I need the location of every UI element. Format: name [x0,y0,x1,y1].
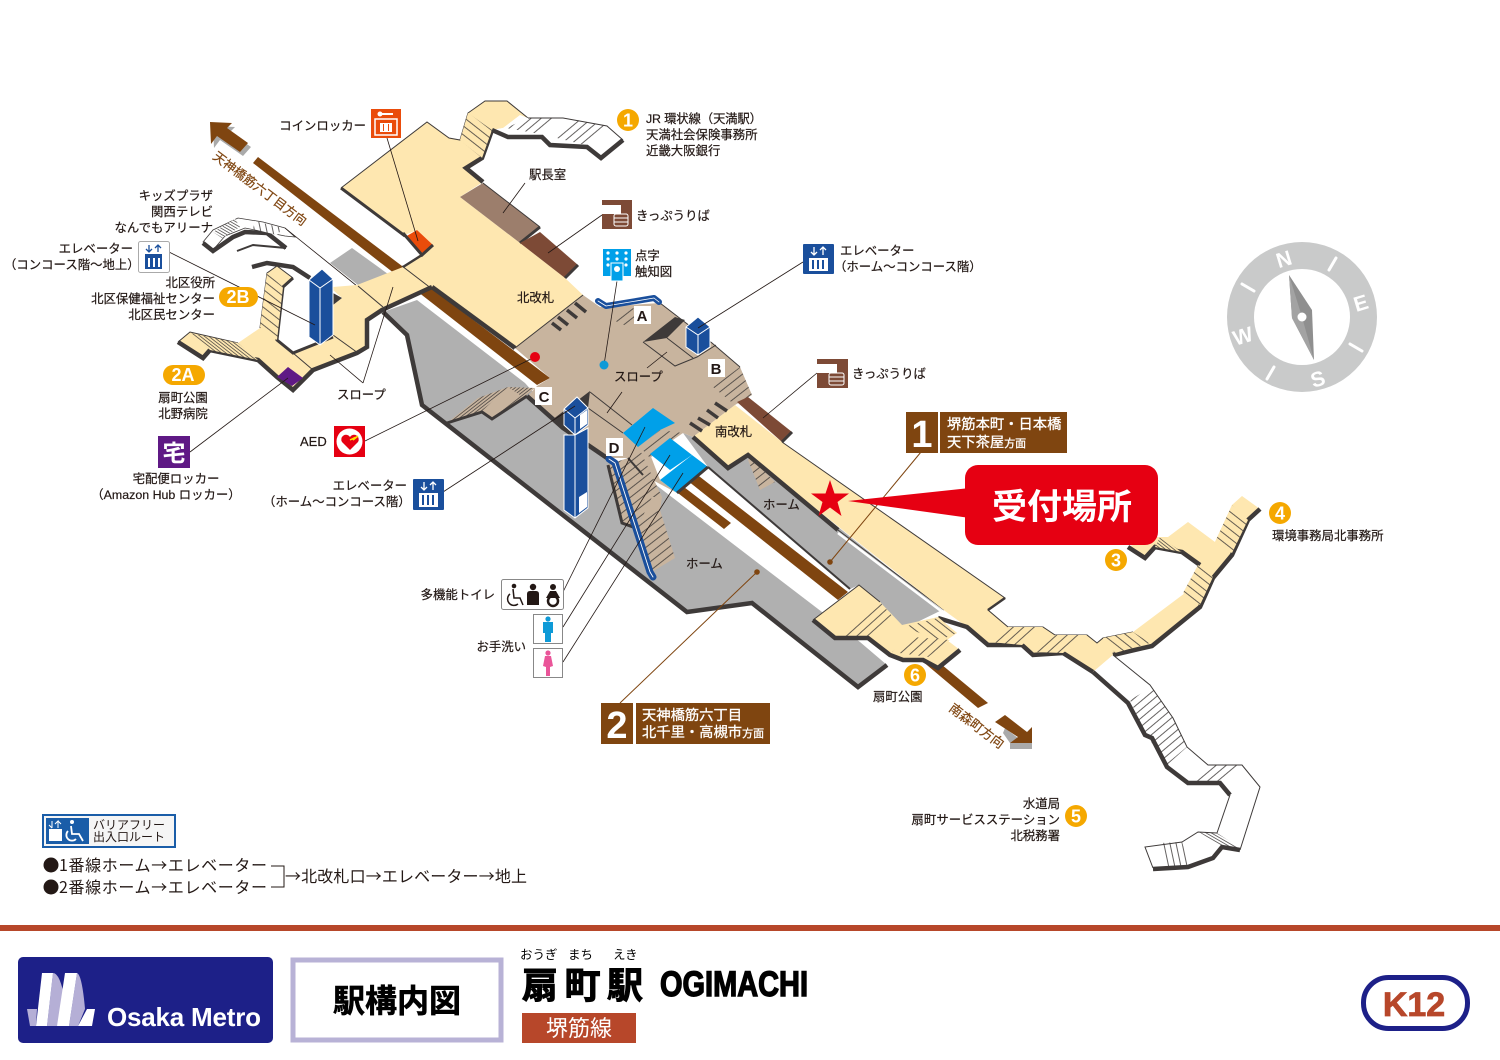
station name: OGIMACHI [660,965,808,1004]
text: exit 5 destinations: 扇町サービスステーション [912,813,1060,827]
stairs: east passage hatches [990,505,1248,653]
sign: platform 2 direction: 天神橋筋六丁目 [642,707,742,724]
text: platform 1: ホーム [763,498,800,512]
marker: exit 2B: 2B [226,287,250,307]
text: ward office: 北区保健福祉センター [91,291,215,306]
marker: exit 5 [1065,805,1087,827]
marker: exit 5: 5 [1071,806,1081,826]
icon: coin locker [371,109,401,138]
compass: E [1351,291,1371,317]
compass: N [1273,247,1295,273]
slope: near center elevator [552,391,632,433]
furigana: まち [568,948,593,962]
text: platform 2: ホーム [686,557,723,571]
text: elevator center: エレベーター [333,479,407,493]
icon: multipurpose toilet [502,580,564,610]
room: station master [460,183,540,243]
text: elevator west [4,242,140,272]
title box: station map [293,960,501,1040]
icon: elevator west [138,242,170,272]
slope: near elevator B [643,317,716,366]
room: south ticket machines [737,397,792,442]
station name [522,965,808,1006]
title box: station map: 駅構内図 [333,983,461,1019]
brown leader to platform 1 [827,452,921,565]
sign: platform 2 direction [601,703,770,747]
text: restrooms: お手洗い [476,640,526,654]
icon: elevator east [803,244,834,274]
text: elevator east: （ホーム〜コンコース階） [834,260,982,274]
text: exit 6 destination: 扇町公園 [873,690,923,704]
brown leader to platform 2 [620,569,760,703]
leader lines [169,138,817,662]
text: exit 5 destinations [912,797,1060,843]
stairs: small hatch on Line 1 platform [748,457,775,490]
text: station master room: 駅長室 [529,168,566,182]
text: elevator west: （コンコース階〜地上） [4,258,140,272]
logo: Osaka Metro: Osaka Metro [107,1002,261,1032]
platform: Line 1 platform [683,433,944,628]
text: slope center: スロープ [614,370,663,384]
stairs: north cream hatches [190,113,492,360]
concourse: south cream area and east passage [693,405,1260,672]
text: slope west: スロープ [337,388,386,402]
elevator: east box [686,317,710,355]
sign: platform 1 direction: 1 [911,414,933,456]
legend: barrier free route text: 2番線ホーム→エレベーター [59,874,267,898]
text: exit 5 destinations: 北税務署 [1010,829,1060,843]
marker: exit 6: 6 [910,666,920,686]
icon: men's toilet [534,614,562,644]
icon: AED [334,426,365,457]
divider line [0,925,1500,931]
label: A [634,306,651,325]
restroom: women's toilet floor [660,455,708,493]
sign: platform 1 direction [906,412,1067,456]
icon: ticket machine north [602,200,632,229]
fare gates: south [690,403,727,431]
text: ward office [91,275,215,322]
marker: exit 4 [1269,502,1291,524]
text: exit 1 destinations: 天満社会保険事務所 [646,127,758,142]
text: coin locker: コインロッカー [279,119,366,133]
legend: barrier free route text [44,852,527,898]
slope lines in lower cream passage [293,266,432,370]
text: elevator center [263,479,411,509]
sign: platform 1 direction: 堺筋本町・日本橋 [947,416,1061,433]
text: elevator east [834,244,982,274]
sign: platform 2 direction: 北千里・高槻市方面 [642,724,764,741]
icon: braille map [603,249,631,281]
stairs: D lower flights [607,450,675,573]
label: B [708,359,725,378]
track: northbound rail strip [253,157,550,385]
legend: barrier free badge: バリアフリー [93,818,165,832]
escalator: A [598,298,659,306]
text: ticket south: きっぷうりば [852,367,926,381]
text: south gate: 南改札 [715,424,752,439]
text: kids plaza: なんでもアリーナ [114,221,213,235]
legend: barrier free route text: 1番線ホーム→エレベーター [59,852,267,876]
stairs: A [613,306,640,325]
direction text: north-west: 天神橋筋六丁目方向 [210,148,310,229]
delivery locker room [277,367,303,386]
icon: delivery locker [158,436,190,468]
stairs: exit 6 block [813,585,960,668]
text: braille map [635,249,672,279]
stairs: B [713,367,752,405]
passage: white section to exit 5 [1093,655,1260,869]
icon: women's toilet [534,648,562,678]
sign: platform 1 direction: 天下茶屋方面 [947,434,1026,451]
text: north gate: 北改札 [517,290,554,305]
direction text: south-east: 南森町方向 [946,700,1007,752]
text: kids plaza [114,188,213,235]
legend: barrier free badge [43,815,175,847]
text: ward office: 北区役所 [165,275,215,290]
text: elevator west: エレベーター [59,242,133,256]
text: exit 2A destinations: 扇町公園 [158,391,208,405]
station code: K12 [1364,978,1468,1028]
text: delivery locker: （Amazon Hub ロッカー） [91,488,241,502]
station code: K12: K12 [1383,986,1445,1024]
braille map location dot [600,360,608,370]
tan area outline edges [527,396,607,458]
platform: small grey section north [330,248,388,285]
text: ward office: 北区民センター [128,308,215,322]
track: southern rail strips [674,473,988,708]
icon: delivery locker: 宅 [162,440,186,466]
text: multipurpose toilet: 多機能トイレ [421,587,495,602]
sign: platform 2 direction: 2 [606,705,628,747]
marker: exit 2A: 2A [171,365,195,385]
text: kids plaza: キッズプラザ [139,188,213,203]
marker: exit 2B [219,287,258,307]
legend: barrier free route text: →北改札口→エレベーター→地上 [285,863,527,887]
line name: Sakaisuji: 堺筋線 [546,1016,612,1041]
text: delivery locker: 宅配便ロッカー [133,472,219,486]
escalator: D [609,459,653,577]
concourse: north cream area with 2A/2B passages [178,101,583,390]
label: D [606,438,623,457]
compass: S [1308,367,1328,393]
label: A: A [637,308,648,325]
label: C [535,387,552,406]
station name: 扇町駅 [522,965,643,1006]
logo: Osaka Metro [18,957,273,1043]
text: elevator center: （ホーム〜コンコース階） [263,495,411,509]
marker: exit 2A [163,365,205,385]
star: reception location [811,480,849,516]
text: ticket north: きっぷうりば [636,209,710,223]
callout: reception: 受付場所 [992,488,1132,527]
marker: exit 6 [904,664,926,686]
marker: exit 3: 3 [1111,550,1121,570]
text: exit 5 destinations: 水道局 [1023,797,1060,811]
text: exit 4 destination: 環境事務局北事務所 [1272,529,1384,543]
callout: reception [848,465,1158,545]
text: braille map: 触知図 [635,265,672,279]
furigana [520,948,638,962]
track: arrow north-west [210,122,251,156]
restroom: multipurpose toilet floor [623,408,683,458]
label: B: B [711,361,722,378]
text: exit 2A destinations [158,391,208,421]
text: kids plaza: 関西テレビ [151,205,213,219]
icon: elevator center [413,479,444,510]
text: elevator east: エレベーター [840,244,914,258]
room: north ticket machines [520,232,578,278]
text: exit 1 destinations: 近畿大阪銀行 [646,144,720,158]
marker: exit 1: 1 [623,110,633,130]
text: exit 1 destinations: JR 環状線（天満駅） [646,111,762,126]
label: D: D [609,440,620,457]
text: delivery locker [91,472,241,502]
platform: Line 2 platform [383,300,887,687]
fare gates: north [552,303,586,330]
marker: exit 3 [1105,549,1127,571]
passage: exit 1 white section [492,115,623,158]
text: braille map: 点字 [635,249,660,263]
room arc: kids plaza passage [203,218,383,307]
label: C: C [539,389,550,406]
furigana: えき [613,948,638,962]
furigana: おうぎ [520,948,558,962]
track: arrow south-east [995,715,1032,749]
restroom: men's toilet floor [650,438,692,470]
text: exit 1 destinations [646,111,762,158]
elevator: center shaft [564,397,588,518]
line name: Sakaisuji [522,1013,636,1043]
stairs: C [447,387,535,423]
marker: exit 4: 4 [1275,504,1285,524]
elevator: north tall shaft [309,269,333,345]
legend: barrier free badge: 出入口ルート [93,830,165,844]
compass [1227,242,1377,393]
concourse: tan paid area [515,295,740,493]
coin locker room [403,230,433,255]
text: AED: AED [300,434,327,449]
marker: exit 1 [617,109,639,131]
text: exit 2A destinations: 北野病院 [158,407,208,421]
AED location dot [530,352,540,362]
compass: W [1230,323,1256,351]
icon: ticket machine south [817,359,848,388]
